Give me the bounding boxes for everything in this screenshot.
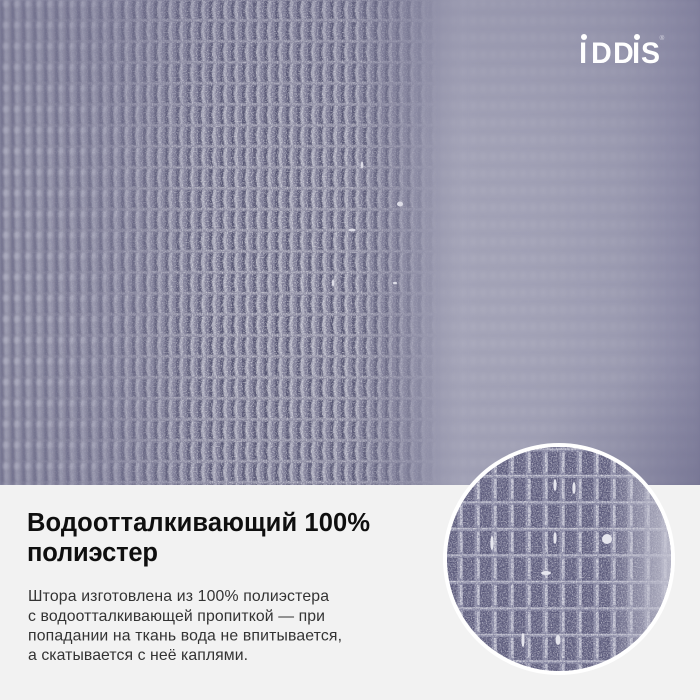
body text: а скатывается с неё каплями. [28, 647, 248, 664]
logo: iddis: IDDIS [579, 37, 660, 70]
bottom text panel [0, 485, 700, 700]
heading: полиэстер [27, 539, 158, 567]
water droplets on fabric [332, 162, 403, 286]
body text: попадании на ткань вода не впитывается, [28, 628, 342, 644]
heading [27, 509, 370, 567]
body text: Штора изготовлена из 100% полиэстера [28, 588, 329, 605]
photo: fabric background [0, 0, 700, 485]
magnified fabric circle [440, 440, 680, 680]
logo: iddis: ® [660, 34, 664, 42]
body text: с водоотталкивающей пропиткой — при [28, 608, 325, 625]
body text [28, 588, 342, 664]
heading: Водоотталкивающий 100% [27, 509, 370, 537]
